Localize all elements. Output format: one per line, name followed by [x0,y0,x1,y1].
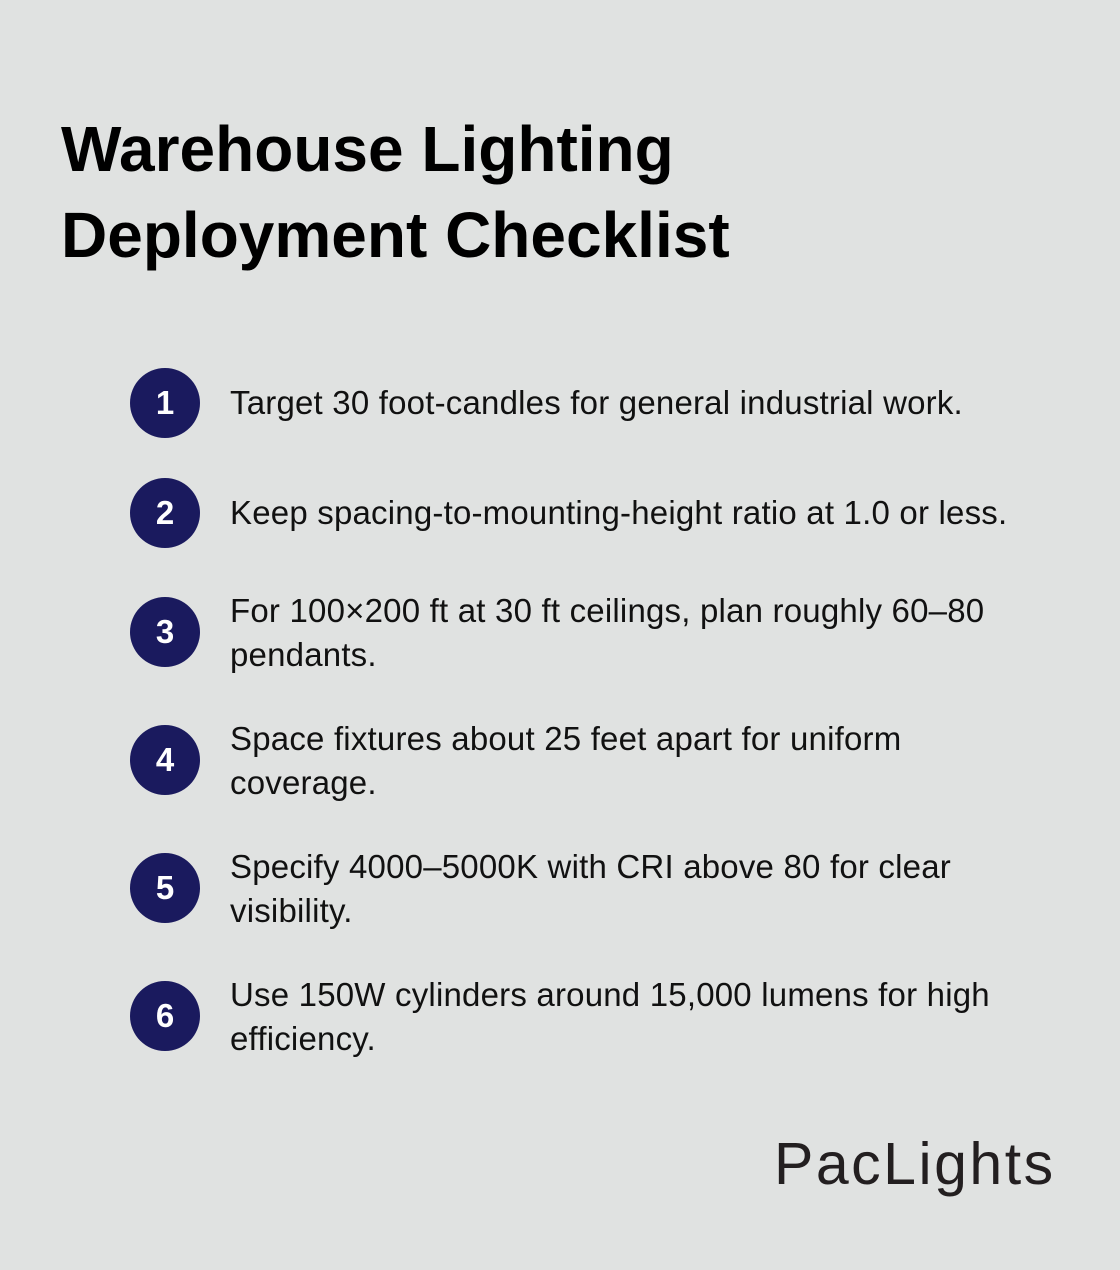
item 5: Specify 4000–5000K with CRI above 80 for clear [230,848,951,885]
logo: PacLights [774,1131,1056,1197]
item 3: 3 [156,613,174,650]
item 6 [130,976,990,1057]
item 3: For 100×200 ft at 30 ft ceilings, plan roughly 60–80 [230,592,984,629]
item 5 [130,848,951,929]
item 4: Space fixtures about 25 feet apart for uniform [230,720,901,757]
item 6: 6 [156,997,174,1034]
title [61,113,730,271]
item 2 [130,478,1007,548]
item 2: 2 [156,494,174,531]
item 1: 1 [156,384,174,421]
item 3: pendants. [230,636,377,673]
item 6: Use 150W cylinders around 15,000 lumens for high [230,976,990,1013]
item 4: 4 [156,741,174,778]
item 1: Target 30 foot-candles for general industrial work. [230,384,963,421]
item 5: visibility. [230,892,353,929]
item 4 [130,720,901,801]
title: Warehouse Lighting [61,113,674,185]
title: Deployment Checklist [61,199,730,271]
item 2: Keep spacing-to-mounting-height ratio at 1.0 or less. [230,494,1007,531]
item 1 [130,368,963,438]
item 3 [130,592,984,673]
item 5: 5 [156,869,174,906]
item 6: efficiency. [230,1020,376,1057]
item 4: coverage. [230,764,377,801]
